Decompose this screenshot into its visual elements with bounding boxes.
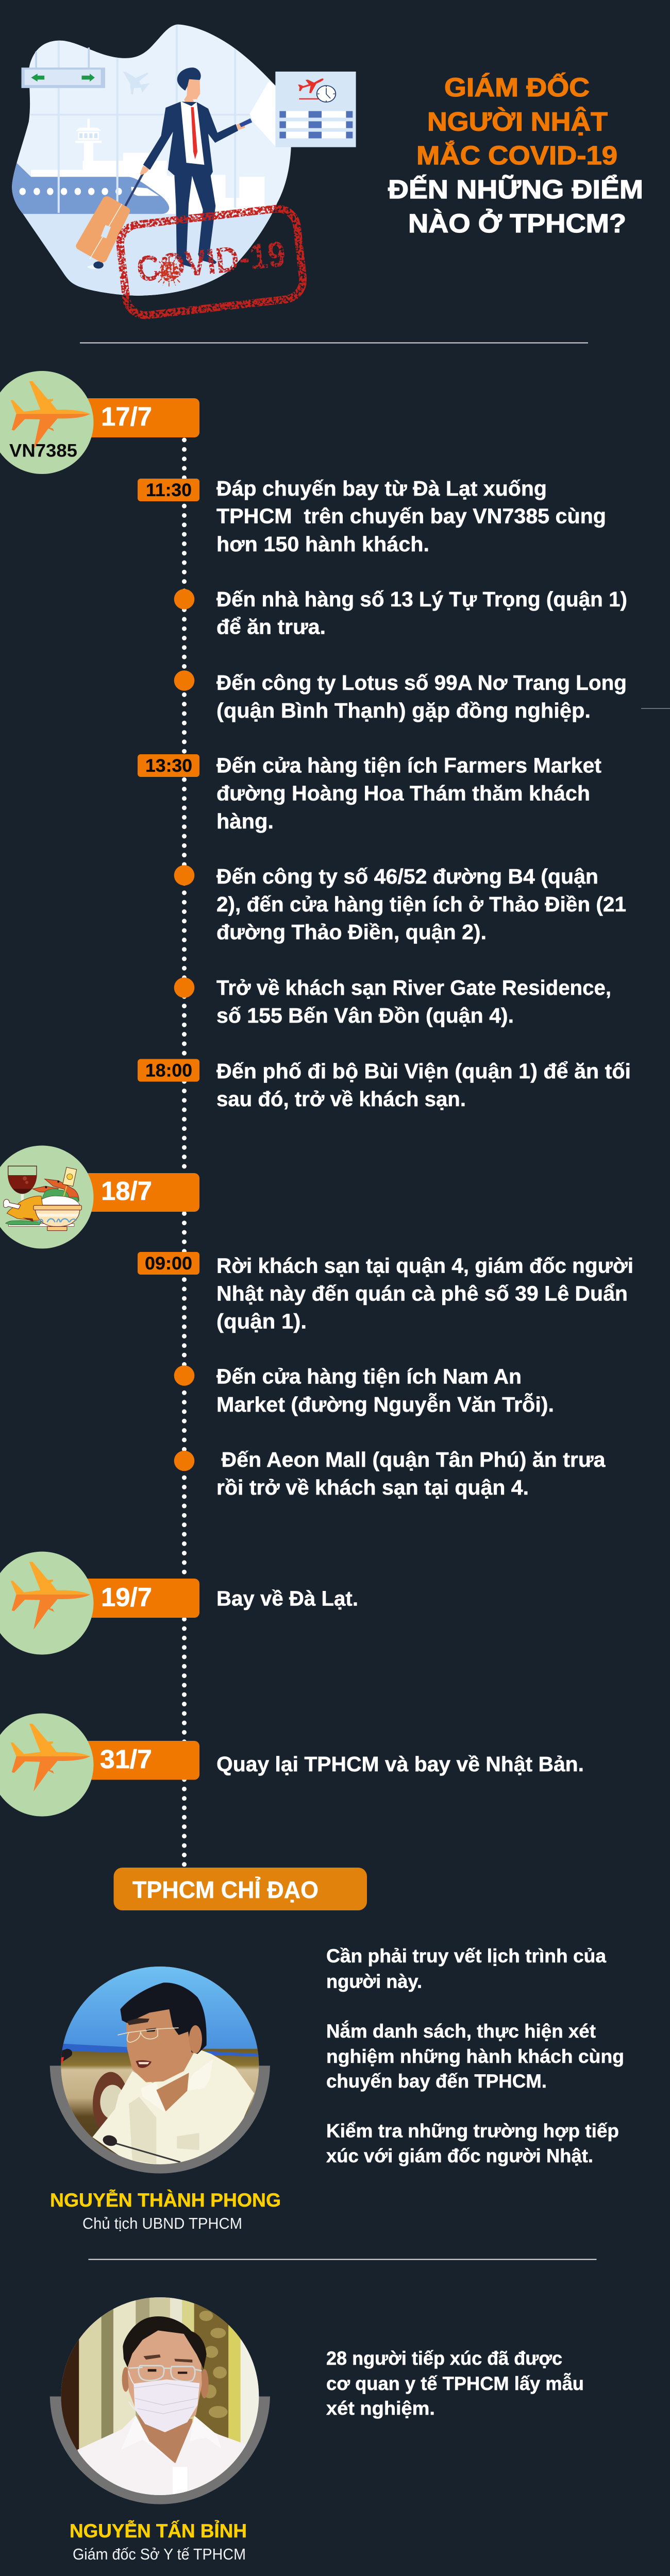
event text: Farmers Market: Đến cửa hàng tiện ích Farmers Market [216, 753, 601, 777]
section: 19/7 date header with plane icon: 19/7 [101, 1583, 152, 1612]
event text: hotel [216, 976, 611, 1027]
time badge 09:00 [138, 1252, 199, 1275]
stamp: COVID-19 [118, 207, 305, 317]
marker dot [174, 977, 194, 998]
panel: flight board with plane and clock [249, 72, 356, 147]
scene: airport window blob [0, 25, 356, 298]
marker dot [174, 589, 194, 609]
name: Nguyen Tan Binh: NGUYỄN TẤN BỈNH [70, 2520, 247, 2541]
marker dot [174, 670, 194, 691]
event text: company B4 and Thao Dien store: Đến công ty số 46/52 đường B4 (quận [216, 865, 598, 888]
event text: Farmers Market: đường Hoàng Hoa Thám thăm khách [216, 781, 590, 805]
statement: Nguyen Tan Binh: 28 người tiếp xúc đã được [326, 2348, 562, 2369]
statement: Nguyen Tan Binh: xét nghiệm. [326, 2398, 435, 2419]
event text: back to Da Lat: Bay về Đà Lạt. [216, 1587, 358, 1611]
title: NGƯỜI NHẬT [427, 106, 608, 136]
section: 19/7 date header with plane icon [0, 1552, 199, 1655]
time badge 11:30 [138, 479, 199, 501]
event text: arrival flight: hơn 150 hành khách. [216, 532, 429, 556]
event text: Bui Vien: Đến phố đi bộ Bùi Viện (quận 1) để ăn tối [216, 1059, 631, 1083]
section: 17/7 date header with plane icon [0, 371, 199, 474]
event text: restaurant: để ăn trưa. [216, 615, 326, 639]
section: 18/7 date header with food icon [0, 1146, 199, 1249]
portrait: Nguyen Thanh Phong [50, 1967, 270, 2174]
timeline dotted line [182, 440, 187, 1867]
section: 18/7 date header with food icon: 18/7 [101, 1176, 152, 1206]
section: 31/7 date header with plane icon: 31/7 [100, 1744, 152, 1774]
event text: coffee shop: Rời khách sạn tại quận 4, giám đốc người [216, 1254, 633, 1278]
event text: Lotus company [216, 671, 627, 722]
name: Nguyen Thanh Phong: NGUYỄN THÀNH PHONG [50, 2189, 281, 2211]
event text: Lotus company: (quận Bình Thạnh) gặp đồng nghiệp. [216, 699, 591, 722]
section: 17/7 date header with plane icon: 17/7 [101, 402, 152, 431]
stamp: COVID-19: COVID-19 [135, 233, 288, 290]
event text: coffee shop: Nhật này đến quán cà phê số 39 Lê Duẩn [216, 1282, 628, 1306]
time badge 18:00 [138, 1059, 199, 1082]
event text: Nam An Market: Market (đường Nguyễn Văn Trỗi). [216, 1393, 554, 1416]
time badge 18:00: 18:00 [145, 1060, 192, 1081]
event text: Farmers Market [216, 753, 601, 833]
statement: Nguyen Thanh Phong: xúc với giám đốc người Nhật. [326, 2145, 593, 2166]
statement: Nguyen Thanh Phong: Nắm danh sách, thực hiện xét [326, 2020, 596, 2042]
illustration: traveller at the airport with COVID-19 stamp [0, 25, 356, 317]
heading: TPHCM chi dao [113, 1868, 367, 1910]
figure: businessman with phone [140, 67, 252, 267]
icon: direction sign [22, 47, 105, 88]
title: NÀO Ở TPHCM? [408, 208, 626, 238]
statement: Nguyen Tan Binh: cơ quan y tế TPHCM lấy mẫu [326, 2373, 584, 2394]
statement: Nguyen Tan Binh [326, 2348, 584, 2419]
event text: Nam An Market: Đến cửa hàng tiện ích Nam An [216, 1364, 522, 1388]
time badge 13:30 [138, 754, 199, 777]
section: 31/7 date header with plane icon [0, 1714, 199, 1817]
time badge 11:30: 11:30 [146, 480, 192, 500]
statement: Nguyen Thanh Phong [326, 1945, 624, 2166]
statement: Nguyen Thanh Phong: người này. [326, 1971, 422, 1992]
event text: Aeon Mall: Đến Aeon Mall (quận Tân Phú) ăn trưa [222, 1448, 606, 1471]
heading: TPHCM chi dao: TPHCM CHỈ ĐẠO [132, 1876, 319, 1903]
time badge 13:30: 13:30 [145, 756, 192, 776]
event text: Bui Vien [216, 1059, 631, 1111]
statement: Nguyen Thanh Phong: chuyến bay đến TPHCM. [326, 2071, 547, 2092]
title [388, 72, 643, 238]
event text: Aeon Mall [216, 1448, 606, 1499]
marker dot [174, 1451, 194, 1471]
event text: coffee shop [216, 1254, 633, 1333]
event text: coffee shop: (quận 1). [216, 1310, 307, 1333]
name: Nguyen Thanh Phong [50, 2189, 281, 2232]
statement: Nguyen Thanh Phong: Kiểm tra những trường hợp tiếp [326, 2121, 619, 2141]
event text: company B4 and Thao Dien store: 2), đến cửa hàng tiện ích ở Thảo Điền (21 [216, 892, 626, 916]
event text: arrival flight: TPHCM trên chuyến bay VN7385 cùng [216, 504, 606, 528]
title: MẮC COVID-19 [416, 140, 617, 170]
section: 17/7 date header with plane icon: VN7385 [9, 441, 77, 461]
name: Nguyen Tan Binh [70, 2520, 247, 2563]
name: Nguyen Thanh Phong: Chủ tịch UBND TPHCM [82, 2214, 242, 2232]
event text: Lotus company: Đến công ty Lotus số 99A Nơ Trang Long [216, 671, 627, 694]
event text: company B4 and Thao Dien store [216, 865, 626, 944]
name: Nguyen Tan Binh: Giám đốc Sở Y tế TPHCM [73, 2545, 246, 2563]
statement: Nguyen Thanh Phong: nghiệm những hành khách cùng [326, 2046, 624, 2067]
statement: Nguyen Thanh Phong: Cần phải truy vết lịch trình của [326, 1945, 606, 1967]
event text: company B4 and Thao Dien store: đường Thảo Điền, quận 2). [216, 920, 487, 944]
event text: restaurant [216, 587, 627, 639]
icon: food and wine [4, 1166, 81, 1231]
marker dot [174, 1365, 194, 1386]
event text: return to Japan: Quay lại TPHCM và bay về Nhật Bản. [216, 1752, 584, 1776]
title: GIÁM ĐỐC [444, 72, 590, 102]
event text: Aeon Mall: rồi trở về khách sạn tại quận 4. [216, 1476, 529, 1499]
event text: hotel: Trở về khách sạn River Gate Residence, [216, 976, 611, 999]
portrait: Nguyen Tan Binh [50, 2295, 270, 2504]
event text: Bui Vien: sau đó, trở về khách sạn. [216, 1087, 466, 1111]
event text: restaurant: Đến nhà hàng số 13 Lý Tự Trọng (quận 1) [216, 587, 627, 611]
event text: Farmers Market: hàng. [216, 809, 274, 833]
event text: arrival flight: Đáp chuyến bay từ Đà Lạt xuống [216, 477, 547, 500]
title: ĐẾN NHỮNG ĐIỂM [388, 174, 643, 204]
event text: Nam An Market [216, 1364, 554, 1416]
time badge 09:00: 09:00 [145, 1253, 192, 1274]
event text: hotel: số 155 Bến Vân Đồn (quận 4). [216, 1004, 514, 1027]
marker dot [174, 865, 194, 886]
icon: suitcase [80, 172, 144, 269]
event text: arrival flight [216, 477, 606, 556]
